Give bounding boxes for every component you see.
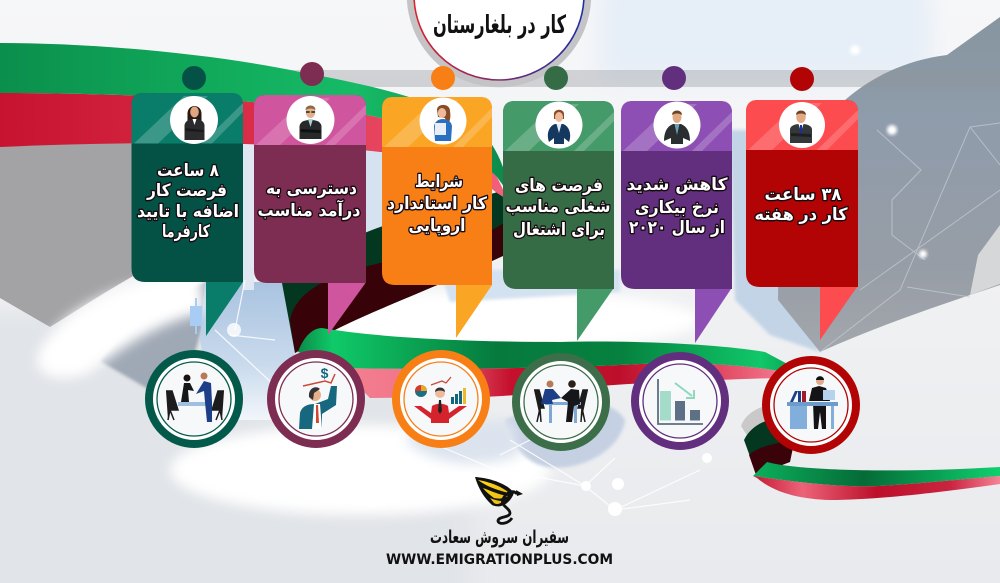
- company name: سفیران سروش سعادت: [430, 527, 569, 548]
- background: white centre haze: [170, 425, 550, 515]
- ribbon: bottom front band: [298, 328, 795, 398]
- logo: [386, 477, 613, 568]
- background: left gray panel: [0, 140, 135, 327]
- background: candle glyph: [190, 298, 202, 334]
- icon: man arms crossed: [790, 110, 812, 143]
- icon: businesswoman: [184, 106, 204, 140]
- website: WWW.EMIGRATIONPLUS.COM: [386, 552, 613, 568]
- icon: man with charts, orange ring: [396, 354, 486, 444]
- text: suitable job opportunities: فرصت های: [515, 176, 603, 196]
- background: pale blue panel: [200, 282, 295, 420]
- icon: man hands on hips: [664, 110, 690, 144]
- text: access to income: درآمد مناسب: [258, 199, 361, 221]
- icon: man pointing to rising chart, plum ring: [271, 354, 361, 444]
- icon: declining bar chart, purple ring: [635, 356, 725, 446]
- panel: suitable job opportunities: [503, 66, 614, 341]
- text: 8 hours overtime: کارفرما: [162, 222, 210, 242]
- panel: 8 hours overtime: [132, 66, 243, 336]
- ribbon: top: [0, 43, 510, 353]
- text: 38 hours per week: [754, 185, 848, 225]
- background: lower gray wedge: [100, 280, 210, 389]
- text: reduced unemployment: [626, 175, 728, 238]
- text: European standard conditions: اروپایی: [408, 216, 466, 236]
- text: 38 hours per week: ۳۸ ساعت: [764, 185, 842, 205]
- text: 8 hours overtime: [137, 161, 239, 242]
- icon: man at office desk, red ring: [766, 360, 856, 450]
- background: pale blue centre: [366, 150, 384, 290]
- text: reduced unemployment: کاهش شدید: [626, 175, 728, 195]
- background: gray strip: [200, 70, 1000, 87]
- panel: European standard conditions: [382, 66, 492, 338]
- icon: woman with folder: [434, 105, 452, 141]
- background: white swoosh: [37, 272, 205, 378]
- text: European standard conditions: [387, 172, 487, 236]
- ribbon: right loop: [741, 404, 1000, 500]
- text: reduced unemployment: نرخ بیکاری: [635, 198, 719, 218]
- background: hand shape: [505, 401, 625, 468]
- text: suitable job opportunities: [506, 176, 610, 240]
- background: light wedge on slate: [970, 225, 1000, 295]
- icon: two men at table, green ring: [516, 357, 606, 447]
- background: blue right of centre: [730, 130, 820, 352]
- text: access to income: دسترسی به: [266, 179, 357, 199]
- background: light spark top: [887, 125, 897, 135]
- text: 8 hours overtime: فرصت کار: [146, 181, 227, 201]
- text: European standard conditions: شرایط: [415, 172, 463, 192]
- background: lower left tone: [0, 310, 470, 583]
- background: slate shape right: [778, 17, 1000, 352]
- text: reduced unemployment: از سال ۲۰۲۰: [629, 218, 725, 238]
- text: European standard conditions: کار استاندارد: [387, 194, 487, 214]
- text: 8 hours overtime: اضافه با تایید: [137, 202, 239, 222]
- background: network lines lower: [215, 280, 700, 510]
- text: suitable job opportunities: برای اشتغال: [513, 220, 605, 240]
- text: suitable job opportunities: شغلی مناسب: [506, 197, 610, 217]
- panel: 38 hours per week: [746, 67, 858, 340]
- title: کار در بلغارستان: [433, 10, 566, 39]
- icon: man with glasses: [300, 106, 322, 139]
- icon: winged S logo: [475, 477, 523, 523]
- title badge: [410, 0, 588, 84]
- text: 38 hours per week: کار در هفته: [754, 205, 848, 225]
- panel: access to income: [254, 62, 366, 335]
- text: 8 hours overtime: ۸ ساعت: [157, 161, 220, 181]
- background: network lines on slate: [820, 123, 1000, 352]
- icon: man pointing to rising chart, plum ring: $: [321, 365, 329, 381]
- icon: businesswoman navy: [548, 110, 570, 144]
- icon: handshake at table, green ring: [149, 354, 239, 444]
- panel: reduced unemployment: [621, 66, 732, 343]
- text: access to income: [258, 179, 361, 221]
